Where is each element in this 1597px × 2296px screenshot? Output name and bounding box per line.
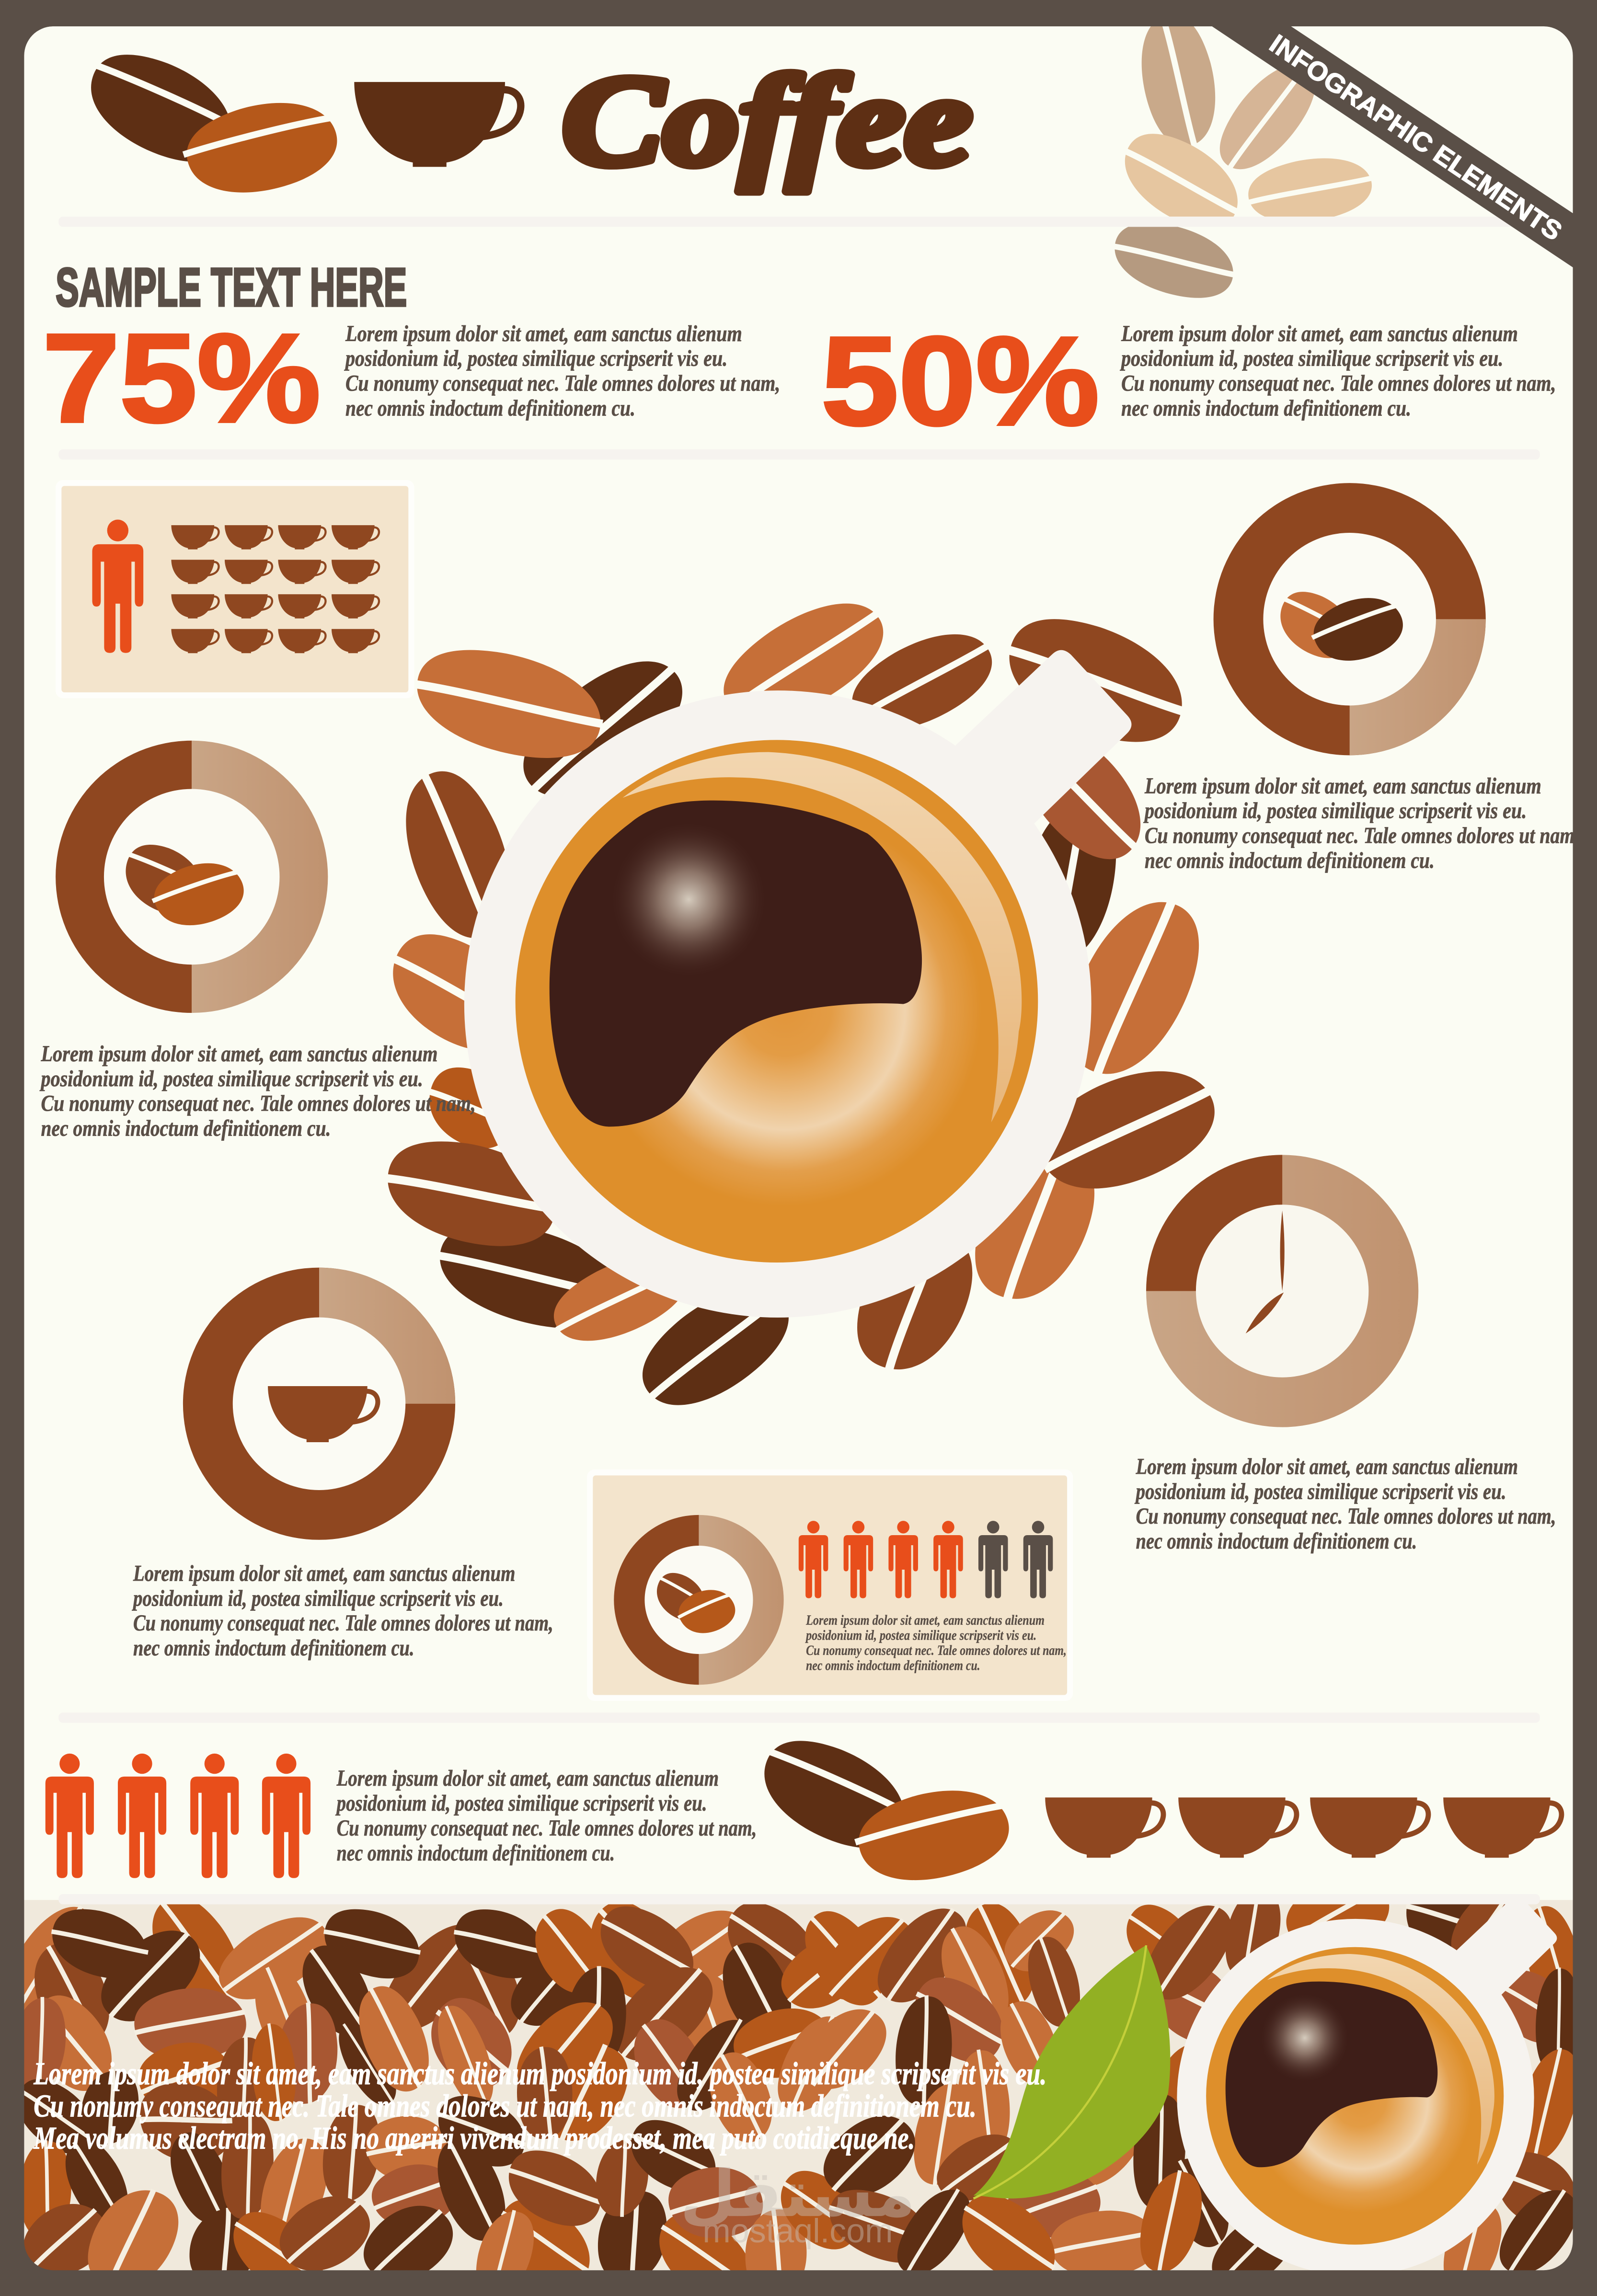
title: Coffee [562,49,972,192]
divider [58,1712,1540,1723]
text block: bottom: nec omnis indoctum definitionem cu. [337,1841,615,1866]
text block: bottom: posidonium id, postea similique scripserit vis eu. [335,1791,707,1816]
text block: left: nec omnis indoctum definitionem cu. [41,1116,331,1141]
text block: bottom [335,1766,757,1866]
text block: upper right: posidonium id, postea similique scripserit vis eu. [1143,799,1527,824]
panel: person and cups [56,480,414,698]
people row: orange [46,1754,310,1878]
icon: beans bottom row [748,1728,1021,1903]
text block: 50 percent: nec omnis indoctum definitionem cu. [1121,396,1411,421]
faded beans top right [1114,26,1372,298]
donut: cup [183,1268,455,1540]
watermark: مستقل [680,2156,916,2231]
stat: 75 percent: 75% [43,308,321,448]
header icon: coffee cup [354,82,521,167]
text block: 75 percent: Cu nonumy consequat nec. Tale omnes dolores ut nam, [345,371,780,396]
panel text: Cu nonumy consequat nec. Tale omnes dolores ut nam, [806,1643,1067,1658]
text block: lower right: posidonium id, postea similique scripserit vis eu. [1134,1479,1506,1504]
divider [58,217,1540,227]
text block: 75 percent: nec omnis indoctum definitionem cu. [345,396,635,421]
donut: half [614,1515,784,1685]
panel text: nec omnis indoctum definitionem cu. [806,1658,980,1673]
text block: white over beans: Cu nonumy consequat nec. Tale omnes dolores ut nam, nec omnis indoctum definitionem cu. [34,2088,977,2124]
text block: 75 percent [344,321,780,421]
text block: left: Cu nonumy consequat nec. Tale omnes dolores ut nam, [41,1091,476,1116]
text block: 75 percent: posidonium id, postea similique scripserit vis eu. [344,346,727,371]
ribbon: infographic elements: INFOGRAPHIC ELEMENTS [1264,28,1567,246]
text block: left: Lorem ipsum dolor sit amet, eam sanctus alienum [41,1042,437,1067]
text block: bottom: Cu nonumy consequat nec. Tale omnes dolores ut nam, [337,1816,757,1841]
text block: lower left: Lorem ipsum dolor sit amet, eam sanctus alienum [133,1561,515,1586]
text block: lower left: nec omnis indoctum definitionem cu. [133,1636,414,1661]
text block: 50 percent [1120,321,1556,421]
text block: lower left: Cu nonumy consequat nec. Tale omnes dolores ut nam, [133,1611,553,1636]
icon: cups row [1045,1797,1562,1858]
panel text [805,1613,1067,1673]
donut: three quarters with beans [1214,483,1486,755]
central coffee cup [464,650,1131,1318]
donut: clock [1146,1155,1418,1427]
text block: 50 percent: posidonium id, postea similique scripserit vis eu. [1120,346,1503,371]
text block: left: posidonium id, postea similique scripserit vis eu. [39,1067,423,1091]
text block: 75 percent: Lorem ipsum dolor sit amet, eam sanctus alienum [345,321,742,346]
text block: lower left [132,1561,553,1661]
cups grid [171,525,379,653]
heading: sample text: SAMPLE TEXT HERE [56,257,407,317]
text block: upper right: nec omnis indoctum definitionem cu. [1145,849,1435,873]
watermark: mostaql.com [702,2212,893,2250]
panel: donut and people [587,1469,1073,1701]
header icon: coffee beans [75,42,349,215]
text block: white over beans: Mea volumus electram no. His no aperiri vivendum prodesset, mea puto cotidieque ne. [34,2120,915,2156]
text block: white over beans: Lorem ipsum dolor sit amet, eam sanctus alienum posidonium id, postea similique scripserit vis eu. [34,2055,1046,2091]
stat: 50 percent: 50% [821,310,1099,451]
ring of coffee beans [373,574,1199,1156]
panel text: Lorem ipsum dolor sit amet, eam sanctus alienum [805,1613,1045,1628]
text block: white over beans [34,2055,1046,2156]
text block: 50 percent: Lorem ipsum dolor sit amet, eam sanctus alienum [1121,321,1518,346]
divider [58,1894,1540,1904]
text block: upper right [1143,774,1579,873]
text block: left [39,1042,476,1141]
text block: lower right [1134,1454,1556,1554]
people row [799,1521,1053,1598]
text block: lower right: nec omnis indoctum definitionem cu. [1136,1529,1417,1554]
text block: bottom: Lorem ipsum dolor sit amet, eam sanctus alienum [336,1766,719,1791]
bottom band of beans [24,1900,1573,2270]
panel text: posidonium id, postea similique scripserit vis eu. [805,1628,1036,1643]
text block: lower left: posidonium id, postea similique scripserit vis eu. [132,1586,504,1611]
ring of coffee beans: lower right [380,882,1232,1434]
icon: green leaf [974,1945,1170,2199]
donut: half with beans [56,741,328,1013]
icon: person [92,520,143,653]
text block: lower right: Lorem ipsum dolor sit amet, eam sanctus alienum [1136,1454,1518,1479]
bottom coffee cup [1177,1896,1557,2276]
